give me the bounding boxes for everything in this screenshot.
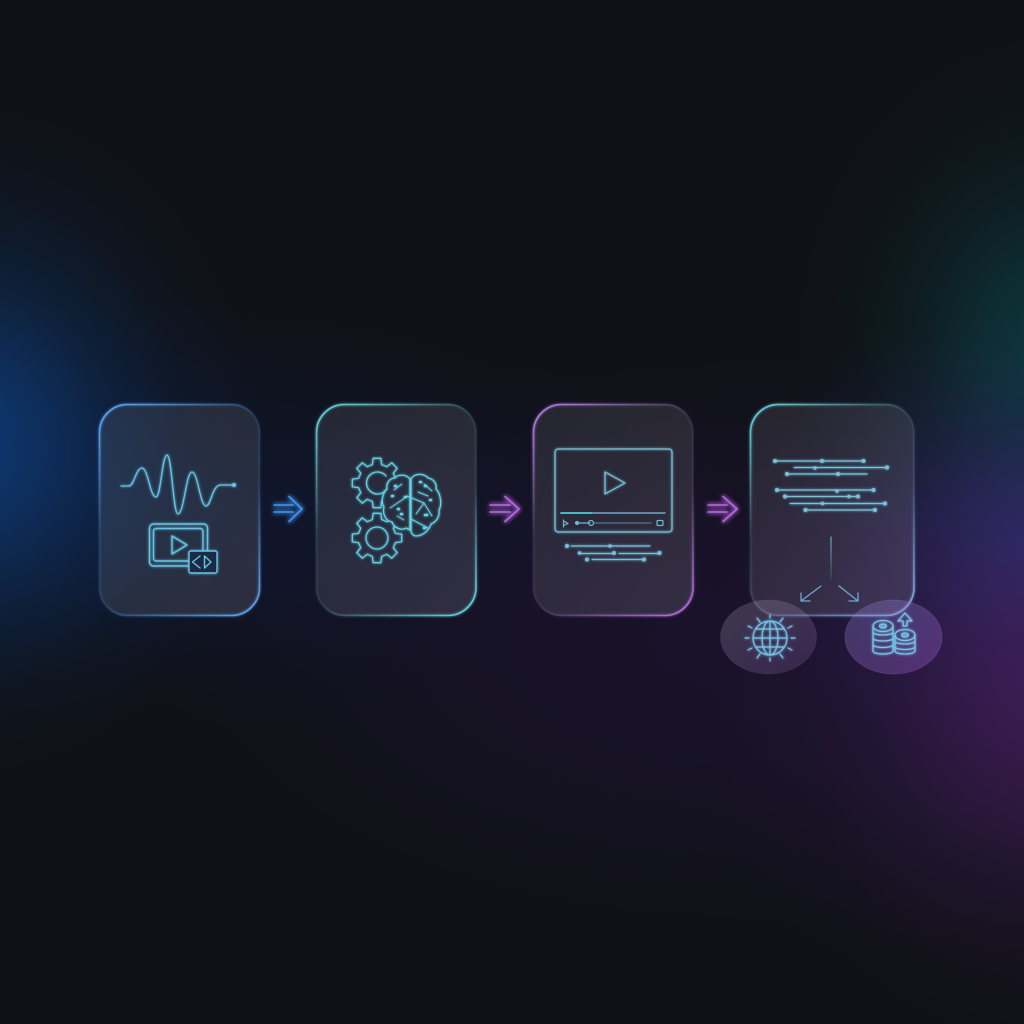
progress bar [561,512,665,514]
node: globe [720,600,816,674]
arrow: step 1 to step 2 [274,496,302,522]
card 1 frame [100,404,260,616]
arrow: step 3 to step 4 [708,496,737,522]
split connector line [830,537,832,579]
icon: video player with code tag [150,524,217,573]
panel: step 1 audio and video input [100,404,260,616]
icon: brain [382,474,441,536]
arrow: step 2 to step 3 [490,496,519,522]
transcript lines [773,459,889,512]
card 2 frame [316,404,476,616]
panel: step 2 AI processing [316,404,476,616]
panel: step 3 video with captions [534,404,693,616]
icon: lower gear [352,513,402,563]
card 4 frame [750,404,914,616]
icon: globe with rays [745,615,795,661]
node: coins [845,600,942,674]
arrow: down to coins [839,586,858,601]
card 3 frame [534,404,693,616]
icon: waveform [121,455,235,514]
panel: step 4 transcript and distribution [720,404,942,674]
caption lines [565,544,662,562]
icon: coin stacks with up arrow [873,613,915,654]
arrow: down to globe [801,586,821,601]
player controls [564,520,663,527]
icon: video player window [555,449,672,532]
icon: upper gear [352,458,402,508]
